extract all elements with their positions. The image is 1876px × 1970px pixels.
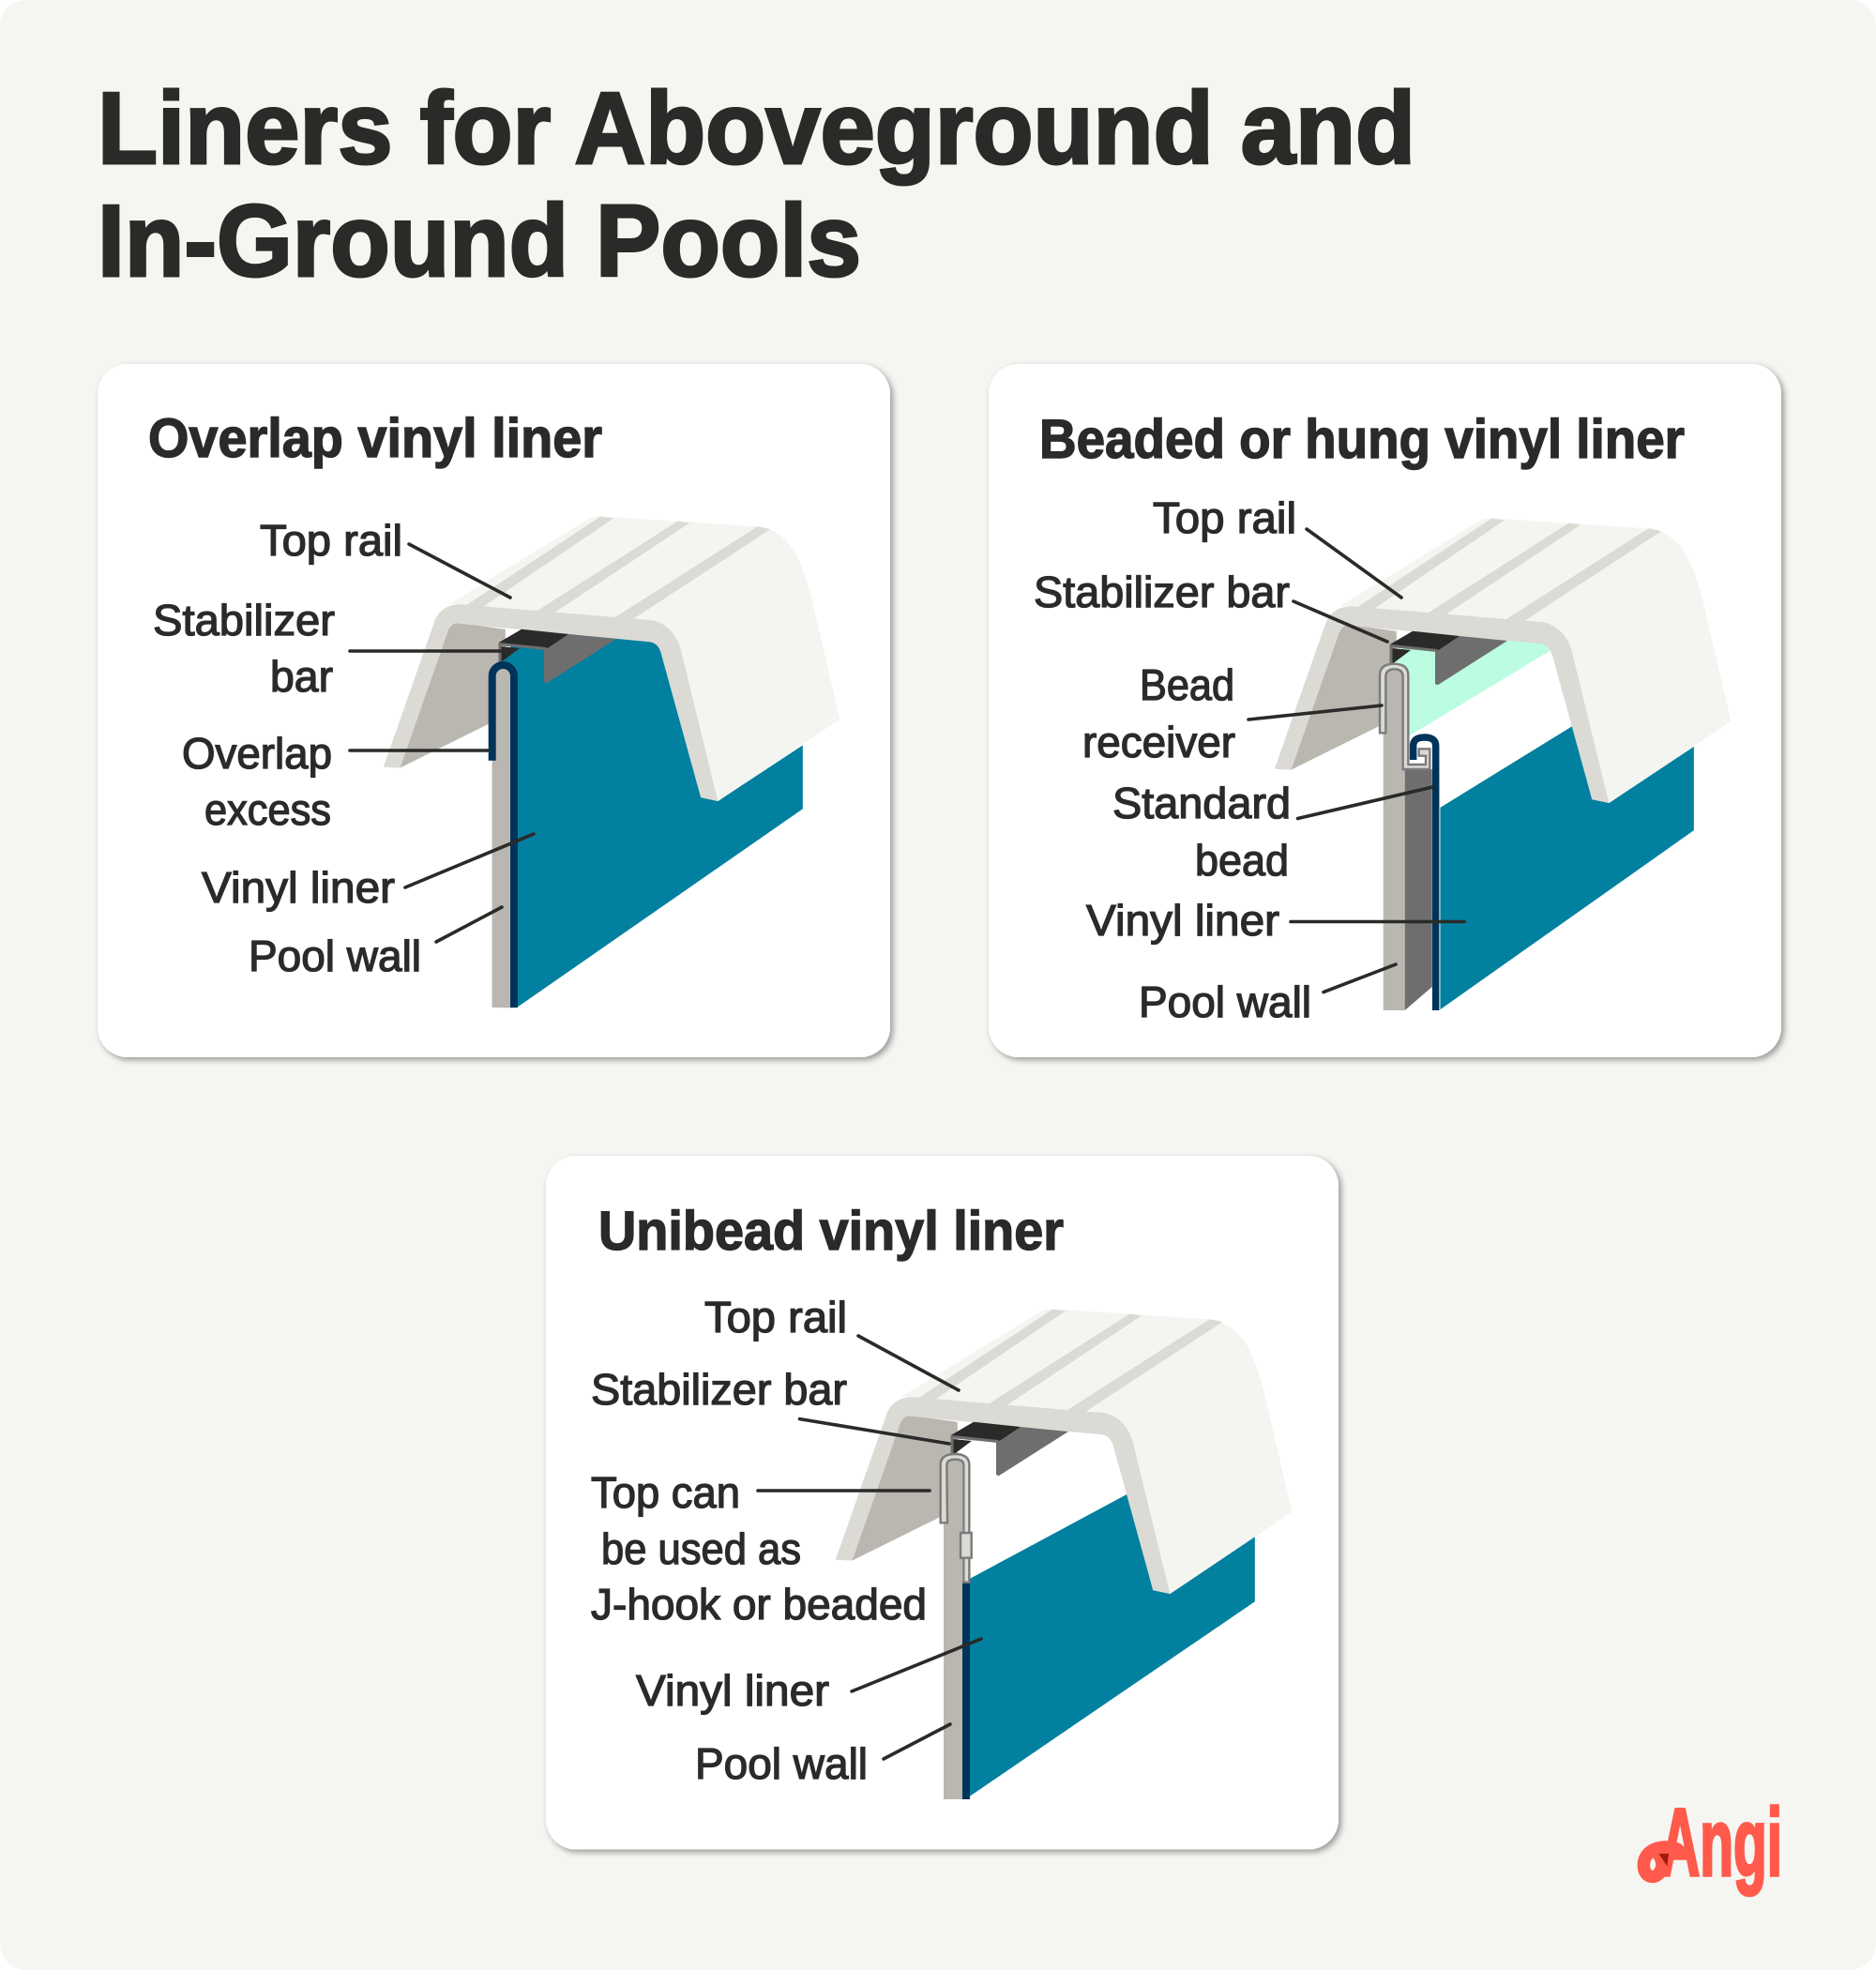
label: bead receiver: receiver — [1082, 718, 1235, 766]
diagram: beaded liner cross-section — [1275, 518, 1731, 1010]
label: standard bead: bead — [1195, 836, 1289, 885]
heading: overlap vinyl liner: Overlap vinyl liner — [148, 408, 602, 469]
title: Liners for Aboveground and — [98, 71, 1415, 186]
label: overlap excess: Overlap — [182, 729, 332, 778]
label: vinyl liner: Vinyl liner — [202, 863, 395, 912]
title: In-Ground Pools — [98, 184, 861, 298]
label: overlap excess: excess — [204, 785, 331, 834]
label: top rail: Top rail — [260, 516, 402, 565]
logo: Angi — [1643, 1789, 1782, 1896]
label: pool wall — [695, 1724, 950, 1788]
label: pool wall: Pool wall — [1139, 977, 1311, 1026]
label: standard bead — [1112, 779, 1432, 885]
label: vinyl liner: Vinyl liner — [636, 1666, 829, 1715]
label: stabilizer bar — [153, 596, 500, 701]
label: pool wall: Pool wall — [249, 932, 421, 980]
label: vinyl liner — [636, 1639, 981, 1715]
label: pool wall — [1139, 964, 1396, 1026]
label: pool wall: Pool wall — [695, 1739, 868, 1788]
label: top rail — [1153, 493, 1401, 598]
panel: overlap vinyl liner — [98, 364, 890, 1057]
label: overlap excess — [182, 729, 488, 834]
label: stabilizer bar: Stabilizer — [153, 596, 335, 644]
panel: beaded or hung vinyl liner — [989, 364, 1781, 1057]
label: top rail — [704, 1293, 959, 1390]
logo: Angi: Angi — [1660, 1789, 1782, 1896]
label: top can be used as j-hook or beaded — [591, 1468, 930, 1629]
label: top rail: Top rail — [704, 1293, 847, 1341]
label: top rail — [260, 516, 510, 598]
label: bead receiver: Bead — [1140, 660, 1234, 709]
label: bead receiver — [1082, 660, 1382, 766]
label: top can be used as j-hook or beaded: J-hook or beaded — [591, 1580, 927, 1629]
label: top rail: Top rail — [1153, 493, 1296, 542]
label: stabilizer bar — [1034, 568, 1387, 642]
heading: unibead vinyl liner: Unibead vinyl liner — [598, 1201, 1064, 1262]
label: stabilizer bar — [591, 1365, 949, 1444]
label: top can be used as j-hook or beaded: Top can — [591, 1468, 740, 1517]
label: vinyl liner: Vinyl liner — [1086, 896, 1279, 945]
diagram: unibead liner cross-section — [836, 1309, 1292, 1799]
label: vinyl liner — [202, 834, 534, 912]
label: stabilizer bar: Stabilizer bar — [591, 1365, 847, 1414]
heading: beaded or hung vinyl liner: Beaded or hung vinyl liner — [1039, 409, 1685, 470]
panel: unibead vinyl liner — [546, 1156, 1339, 1850]
title — [98, 71, 1415, 298]
label: stabilizer bar: bar — [270, 652, 333, 701]
label: pool wall — [249, 907, 502, 980]
label: stabilizer bar: Stabilizer bar — [1034, 568, 1290, 616]
label: standard bead: Standard — [1112, 779, 1291, 827]
label: top can be used as j-hook or beaded: be used as — [601, 1524, 801, 1573]
diagram: overlap liner cross-section — [384, 516, 840, 1008]
